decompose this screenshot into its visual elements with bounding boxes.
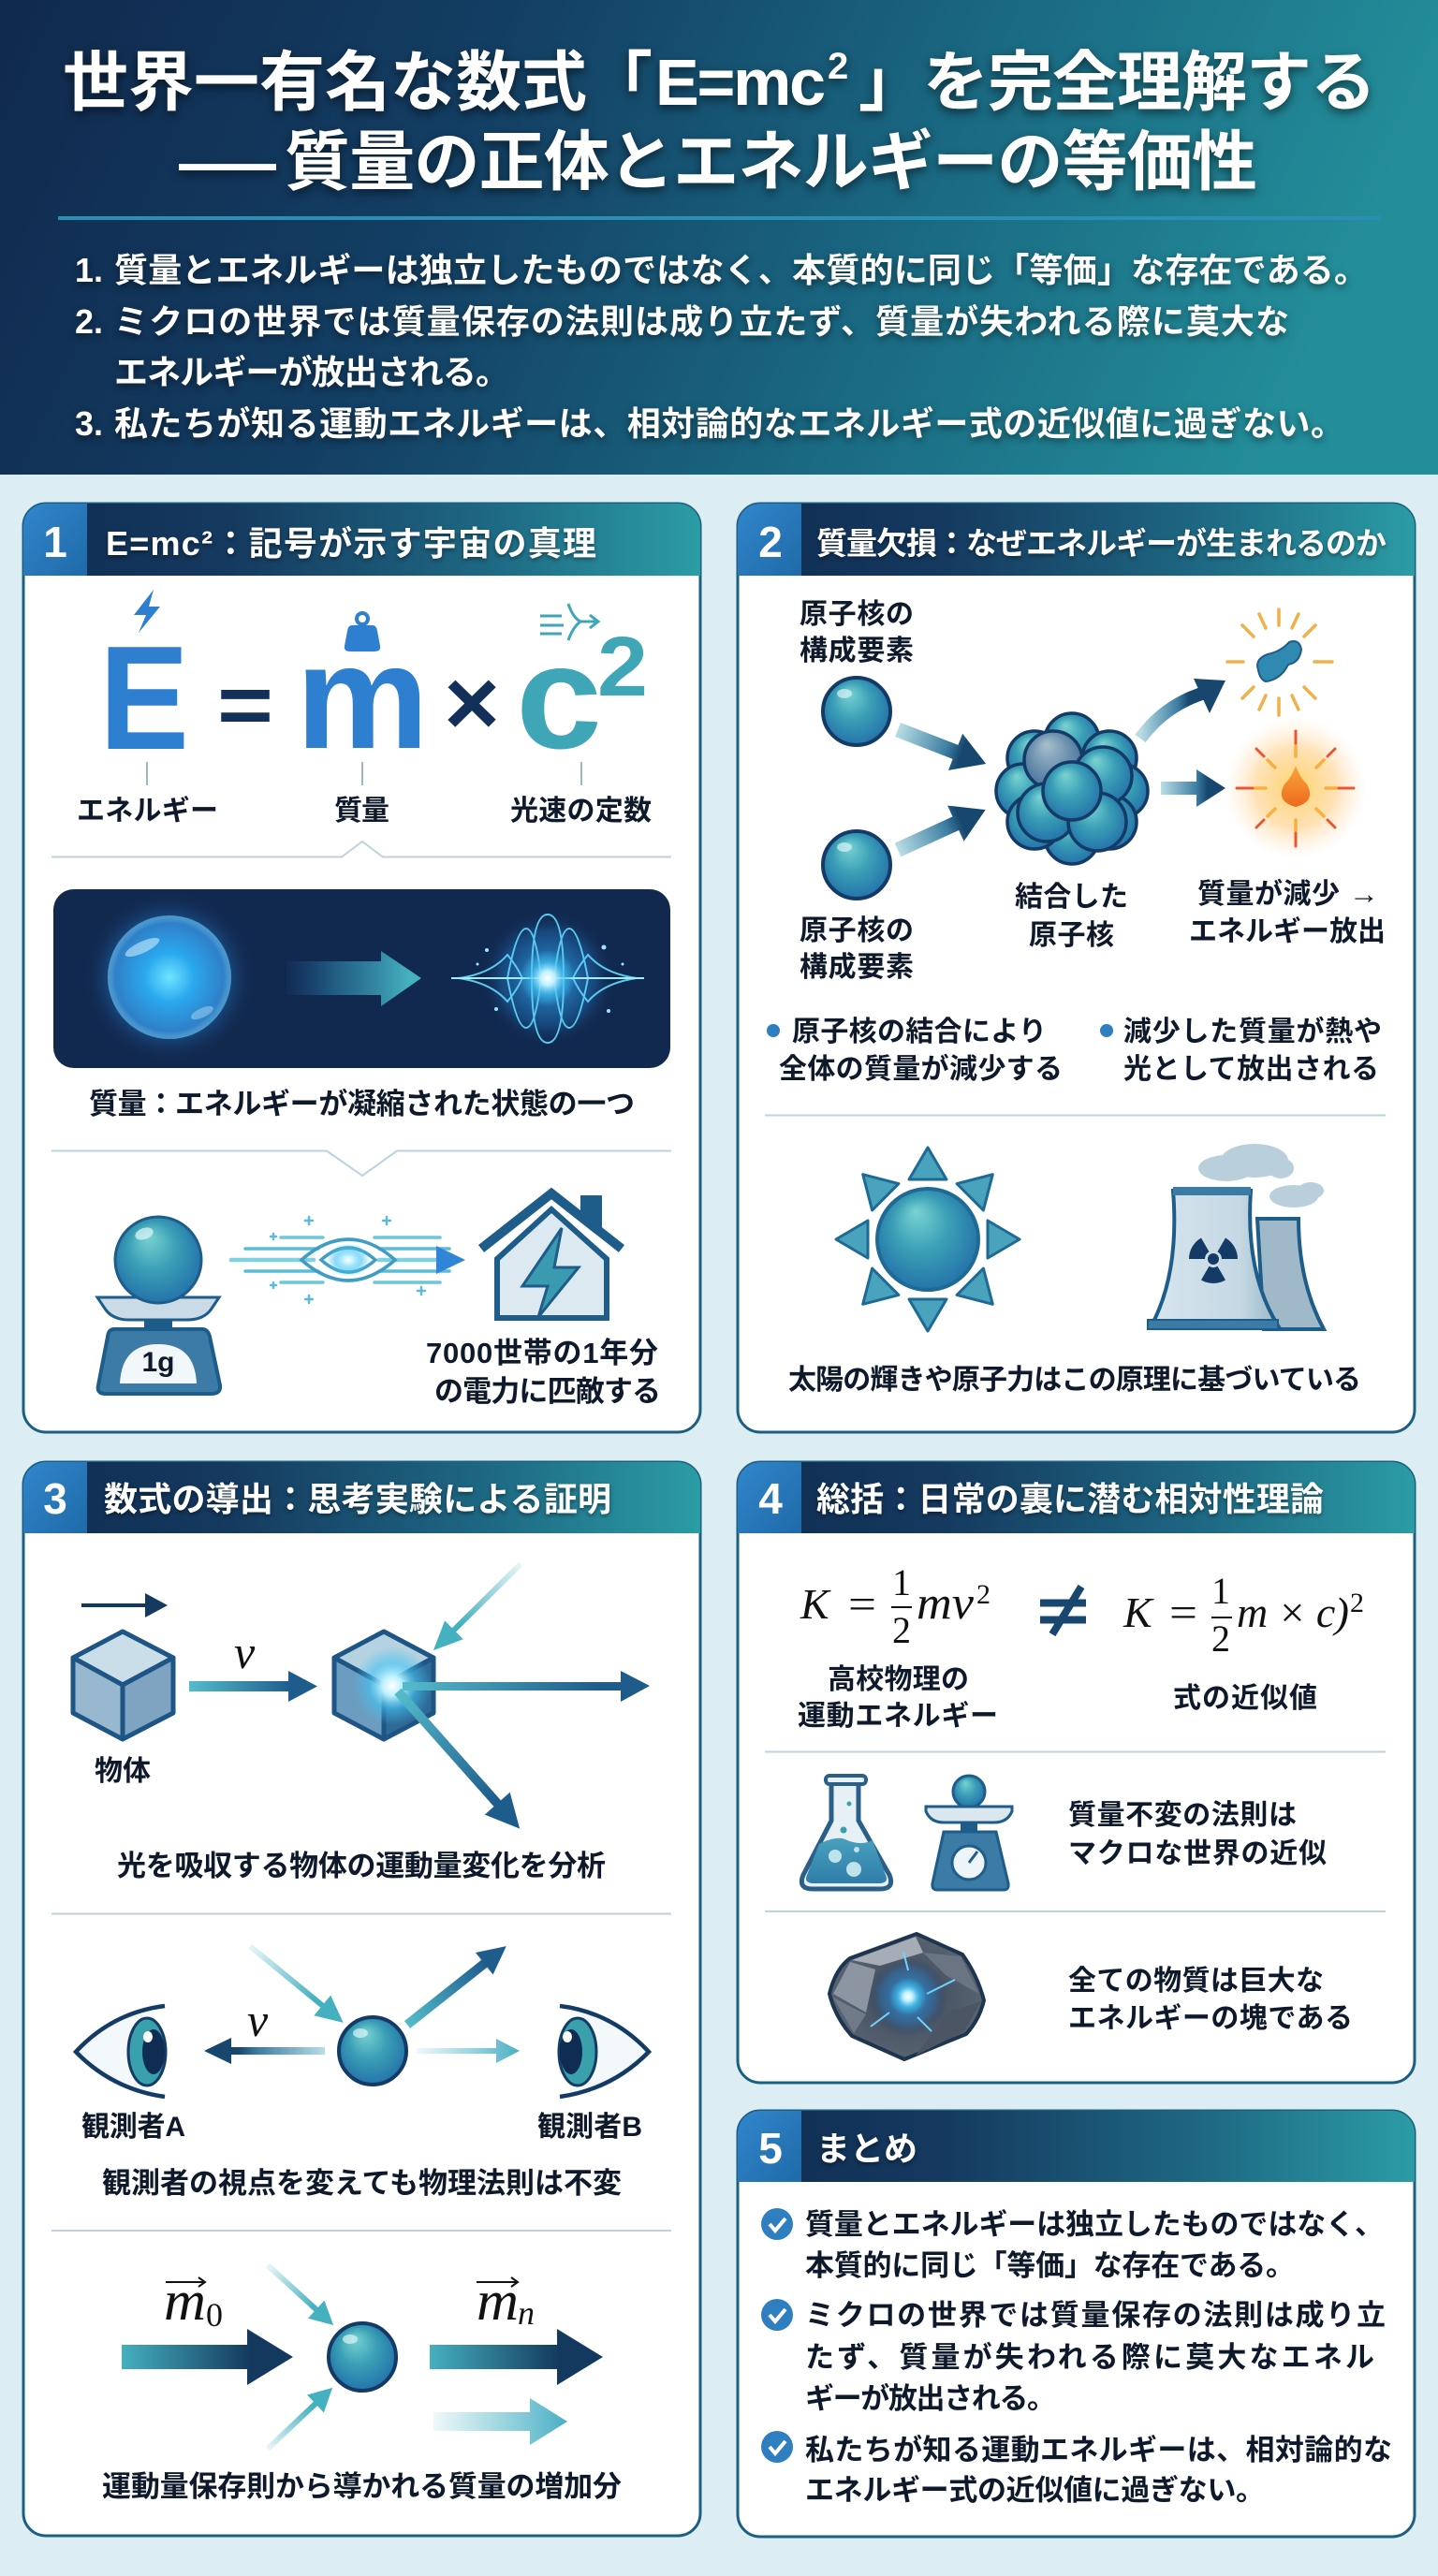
label: nucleus components top: 原子核の xyxy=(800,599,914,630)
formula: kinetic energy: 2 xyxy=(976,1579,990,1610)
arrow: out to top right xyxy=(399,1935,515,2036)
icon: cube xyxy=(73,1632,173,1739)
symbol labels: 質量 xyxy=(334,796,389,827)
icon: energy sphere xyxy=(83,891,256,1063)
arrow: motion xyxy=(81,1593,168,1617)
icon: fire burst xyxy=(1225,717,1367,859)
panel 2 header: 2 xyxy=(758,518,783,566)
conclusion item 1: 質量とエネルギーは独立したものではなく、 xyxy=(805,2208,1384,2241)
title: 2 xyxy=(828,46,848,87)
icon: sphere xyxy=(339,2017,406,2085)
label: approximation: 式の近似値 xyxy=(1173,1683,1317,1714)
text: mass conservation approx: マクロな世界の近似 xyxy=(1068,1838,1327,1869)
label: nucleus components top xyxy=(800,599,914,666)
formula: approximation: K xyxy=(1123,1588,1154,1636)
symbol labels: 光速の定数 xyxy=(510,796,652,827)
formula E = m x c squared: 2 xyxy=(597,621,648,714)
panel 5 header xyxy=(738,2111,1415,2182)
caption: observers: 観測者の視点を変えても物理法則は不変 xyxy=(102,2167,622,2200)
icon: nucleus cluster xyxy=(996,713,1148,864)
bullet left: 原子核の結合により xyxy=(792,1017,1047,1047)
formula: approximation: m × c) xyxy=(1237,1588,1349,1636)
icon: scale with sphere xyxy=(97,1217,220,1394)
label: mn: n xyxy=(518,2294,535,2332)
panel 1 header xyxy=(23,504,700,576)
panel 5: conclusion xyxy=(738,2111,1415,2537)
caption: absorb light: 光を吸収する物体の運動量変化を分析 xyxy=(117,1850,606,1882)
arrow: in bottom xyxy=(259,2378,341,2457)
formula E = m x c squared: = xyxy=(217,659,273,753)
icon: sphere top xyxy=(823,678,890,745)
label: high school physics: 高校物理の xyxy=(828,1664,969,1695)
arrow to fire xyxy=(1161,769,1225,807)
formula E = m x c squared: c xyxy=(516,615,602,780)
label: v: v xyxy=(234,1626,256,1678)
text: all matter is energy: エネルギーの塊である xyxy=(1068,2003,1353,2034)
label: mass decreases: 質量が減少 xyxy=(1197,878,1340,910)
icon: scale with dial xyxy=(926,1776,1012,1890)
text: all matter is energy xyxy=(1068,1966,1353,2034)
formula: approximation: = xyxy=(1169,1588,1197,1636)
arrow: incoming light xyxy=(424,1555,530,1660)
formula: kinetic energy: 1 xyxy=(892,1561,911,1603)
label: combined nucleus xyxy=(1015,882,1128,951)
key points list: ミクロの世界では質量保存の法則は成り立たず、質量が失われる際に莫大な xyxy=(114,302,1289,341)
caption: 7000 households xyxy=(426,1337,661,1408)
icon: scale with sphere: 1g xyxy=(141,1347,175,1378)
bullet right: 光として放出される xyxy=(1123,1054,1379,1085)
conclusion item 1: 本質的に同じ「等価」な存在である。 xyxy=(805,2249,1295,2282)
formula: kinetic energy: = xyxy=(848,1580,876,1628)
key points list: 3. xyxy=(75,404,103,443)
panel 3 header: 3 xyxy=(43,1474,67,1523)
label: v: v xyxy=(247,1994,269,2046)
panel 5 header: まとめ xyxy=(816,2130,917,2168)
key points list: 私たちが知る運動エネルギーは、相対論的なエネルギー式の近似値に過ぎない。 xyxy=(114,404,1344,443)
panel 2 header: 質量欠損：なぜエネルギーが生まれるのか xyxy=(816,526,1387,561)
icon: weight xyxy=(345,613,380,651)
label: mn xyxy=(477,2270,535,2332)
label: high school physics xyxy=(798,1664,998,1732)
arrow: down xyxy=(386,1680,533,1840)
conclusion item 3: エネルギー式の近似値に過ぎない。 xyxy=(805,2474,1265,2507)
header banner xyxy=(0,0,1438,475)
arrow: right xyxy=(403,1671,650,1702)
panel 4 header: 総括：日常の裏に潜む相対性理論 xyxy=(816,1480,1324,1518)
formula: approximation xyxy=(1123,1570,1364,1660)
label: m0: m xyxy=(164,2270,206,2332)
title: 質量の正体とエネルギーの等価性 xyxy=(285,125,1257,198)
caption: 7000 households: 7000世帯の1年分 xyxy=(426,1337,658,1369)
conclusion item 3 xyxy=(761,2431,1392,2507)
label: nucleus components bottom: 構成要素 xyxy=(800,952,914,983)
arrow: in from top left xyxy=(242,1936,352,2033)
key points list: 1. xyxy=(75,251,103,289)
label: nucleus components bottom xyxy=(800,915,914,983)
bullet left: 全体の質量が減少する xyxy=(779,1053,1063,1085)
panel 4: summary xyxy=(738,1462,1415,2083)
caption: 7000 households: の電力に匹敵する xyxy=(434,1375,661,1408)
formula: approximation: 1 xyxy=(1211,1570,1230,1612)
key points list: エネルギーが放出される。 xyxy=(114,353,509,391)
symbol labels xyxy=(77,762,652,827)
panel 3 header xyxy=(23,1462,700,1533)
arrow to cluster bottom xyxy=(889,792,993,868)
label: nucleus components bottom: 原子核の xyxy=(800,915,914,946)
arrow to cluster top xyxy=(890,711,993,783)
arrow: left xyxy=(204,2038,325,2064)
dark energy illustration xyxy=(53,889,670,1068)
panel 4 header xyxy=(738,1462,1415,1533)
formula: approximation: 2 xyxy=(1211,1617,1230,1660)
label: mn: m xyxy=(477,2270,519,2332)
not equal sign xyxy=(1040,1587,1086,1634)
icon: energy wave xyxy=(451,911,644,1046)
label: mass decreases xyxy=(1189,878,1386,947)
label: combined nucleus: 結合した xyxy=(1015,882,1128,913)
curved arrow up xyxy=(1140,679,1225,739)
labels: observers: 観測者A xyxy=(81,2112,185,2143)
icon: sun xyxy=(836,1148,1020,1331)
key points list: 質量とエネルギーは独立したものではなく、本質的に同じ「等価」な存在である。 xyxy=(114,251,1368,289)
conclusion item 2: ギーが放出される。 xyxy=(805,2382,1056,2415)
formula: kinetic energy: K xyxy=(800,1580,831,1628)
icon: house with bolt xyxy=(481,1193,622,1318)
icon: energy flow arrow xyxy=(231,1217,465,1303)
label: high school physics: 運動エネルギー xyxy=(798,1701,998,1732)
panel 1 header: E=mc²：記号が示す宇宙の真理 xyxy=(106,524,596,563)
formula: approximation: 2 xyxy=(1350,1588,1364,1618)
label: m0: 0 xyxy=(206,2296,223,2334)
icon: sphere xyxy=(329,2323,396,2391)
text: mass conservation approx xyxy=(1068,1800,1327,1869)
conclusion item 3: 私たちが知る運動エネルギーは、相対論的な xyxy=(805,2434,1392,2466)
icon: speed of light xyxy=(540,604,598,640)
conclusion item 2: ミクロの世界では質量保存の法則は成り立 xyxy=(805,2299,1386,2332)
formula E = m x c squared xyxy=(99,615,648,781)
conclusion item 1 xyxy=(761,2208,1384,2282)
caption: momentum: 運動量保存則から導かれる質量の増加分 xyxy=(102,2470,622,2503)
icon: particle with rays xyxy=(1227,609,1332,715)
not equal sign: ≠ xyxy=(1063,1609,1064,1611)
panel 4 header: 4 xyxy=(758,1474,783,1523)
icon: lightning xyxy=(134,590,160,633)
caption: mass: 質量：エネルギーが凝縮された状態の一つ xyxy=(89,1088,635,1120)
label: combined nucleus: 原子核 xyxy=(1029,920,1114,951)
title: 世界一有名な数式「 xyxy=(63,46,653,119)
arrow: light right xyxy=(433,2398,567,2445)
panel 1: symbols xyxy=(23,504,700,1432)
formula: kinetic energy xyxy=(800,1561,990,1651)
arrow: big right xyxy=(430,2329,603,2385)
bullet left xyxy=(767,1017,1063,1085)
labels: observers xyxy=(81,2112,642,2143)
arrow: v xyxy=(189,1671,317,1702)
title: E=mc xyxy=(655,46,826,119)
labels: observers: 観測者B xyxy=(537,2112,642,2143)
panel 5 header: 5 xyxy=(758,2124,783,2173)
text: mass conservation approx: 質量不変の法則は xyxy=(1068,1800,1297,1831)
label: object: 物体 xyxy=(95,1756,151,1787)
conclusion item 2: たず、質量が失われる際に莫大なエネル xyxy=(805,2341,1374,2374)
icon: cube glowing xyxy=(334,1632,433,1739)
icon: nuclear plant xyxy=(1148,1144,1324,1329)
icon: sphere bottom xyxy=(823,831,890,899)
key points list: 2. xyxy=(75,302,103,341)
arrow: big left xyxy=(122,2329,293,2385)
formula E = m x c squared: E xyxy=(99,616,189,781)
panel 1 header: 1 xyxy=(43,518,67,566)
panel 2 header xyxy=(738,504,1415,576)
arrow: right light xyxy=(417,2039,520,2063)
arrow xyxy=(286,951,421,1006)
panel 3 header: 数式の導出：思考実験による証明 xyxy=(104,1480,611,1518)
panel 3: derivation xyxy=(23,1462,700,2536)
text: all matter is energy: 全ての物質は巨大な xyxy=(1068,1966,1324,1997)
formula: kinetic energy: mv xyxy=(917,1576,975,1629)
label: nucleus components top: 構成要素 xyxy=(800,636,914,666)
panel 2: mass defect xyxy=(738,504,1415,1432)
title xyxy=(63,46,1376,198)
icon: flask xyxy=(801,1776,891,1889)
arrow: in top xyxy=(259,2256,342,2334)
icon: eye A xyxy=(76,2006,166,2097)
label: mass decreases: エネルギー放出 xyxy=(1189,916,1386,947)
title: — xyxy=(179,125,276,198)
bullet right xyxy=(1100,1016,1382,1085)
formula: kinetic energy: 2 xyxy=(892,1609,911,1651)
bullet right: 減少した質量が熱や xyxy=(1123,1016,1382,1047)
label: m0 xyxy=(164,2270,223,2334)
formula E = m x c squared: × xyxy=(444,651,500,755)
label: mass decreases: → xyxy=(1349,879,1379,910)
icon: eye B xyxy=(559,2006,649,2097)
icon: glowing rock xyxy=(829,1934,984,2059)
symbol labels: エネルギー xyxy=(77,796,218,827)
key points list xyxy=(75,251,1368,443)
conclusion item 2 xyxy=(761,2299,1386,2415)
caption: sun and nuclear: 太陽の輝きや原子力はこの原理に基づいている xyxy=(788,1365,1361,1396)
title: 」を完全理解する xyxy=(858,46,1376,119)
formula E = m x c squared: m xyxy=(296,615,429,780)
